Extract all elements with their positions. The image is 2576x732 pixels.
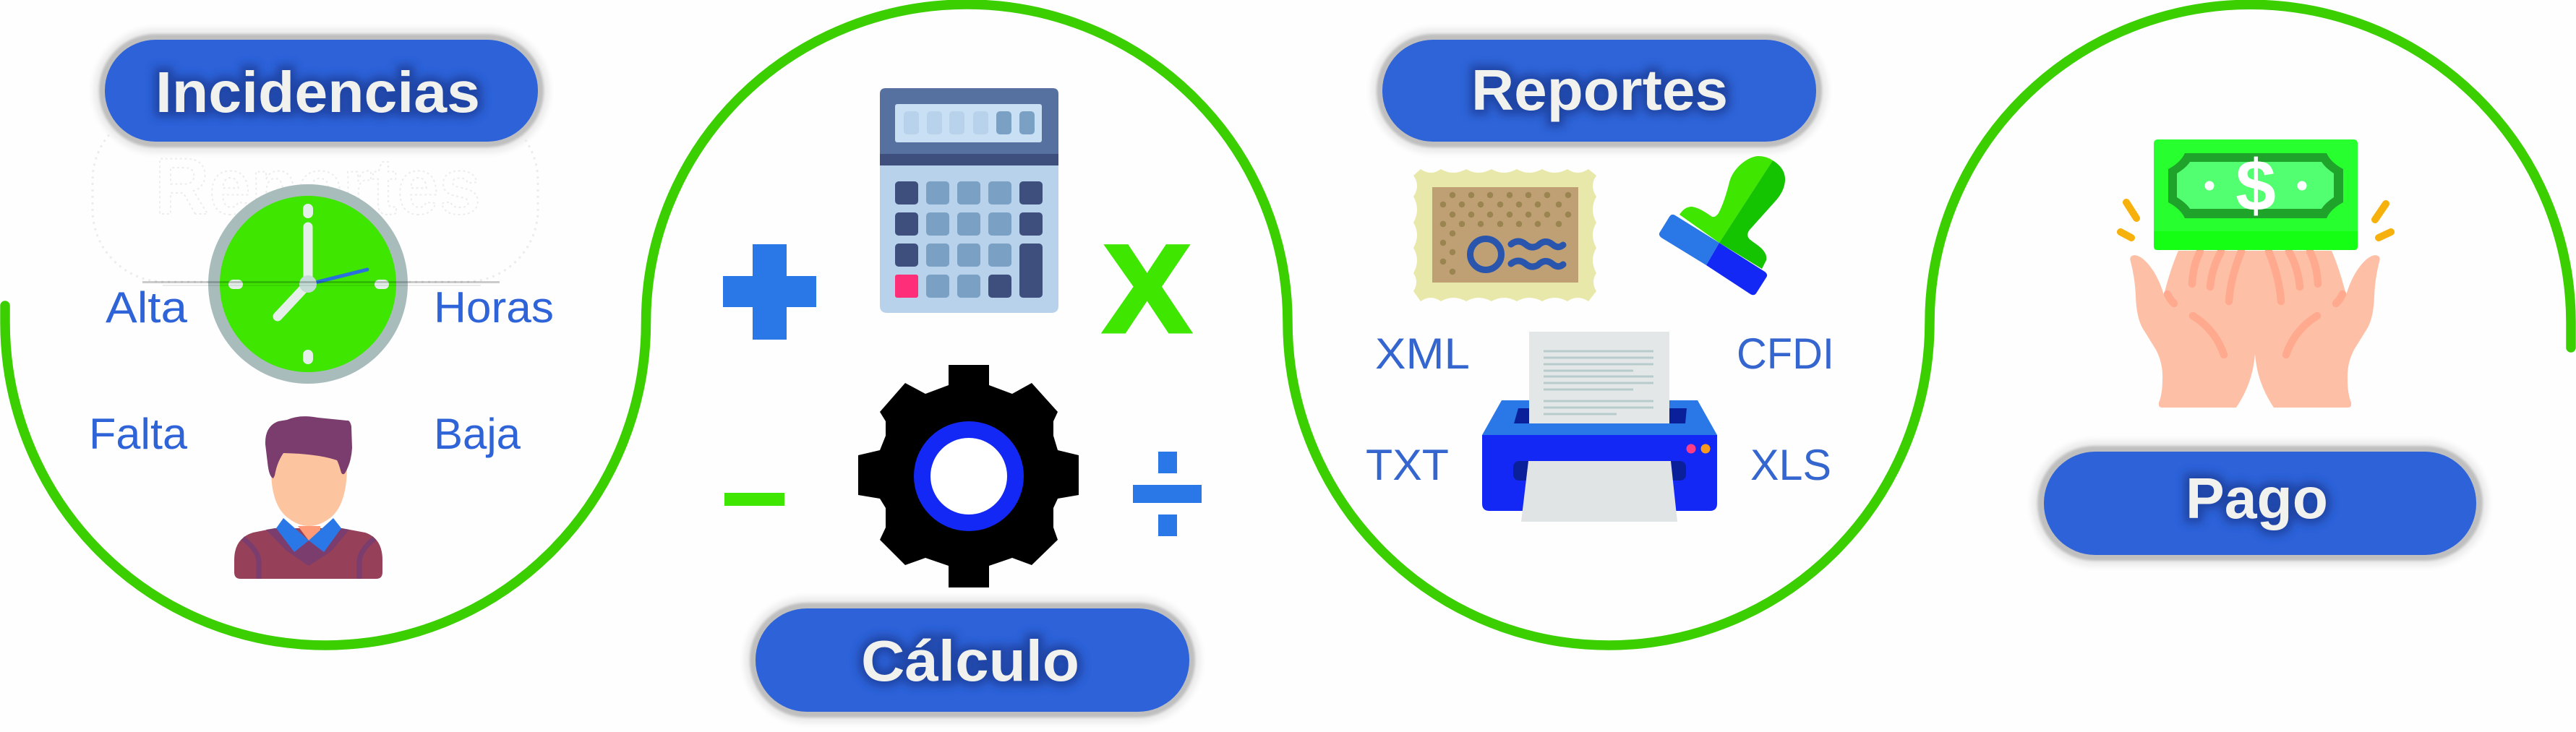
icon: rubber stamp (1659, 156, 1785, 295)
heading pill: Incidencias: Incidencias (155, 60, 480, 124)
icon: stamp certificate (1413, 169, 1596, 301)
heading pill: Pago: Pago (2186, 466, 2328, 530)
label: Alta: Alta (106, 283, 188, 332)
icon: minus sign (724, 493, 784, 506)
ghost artifact behind the heading (93, 108, 538, 282)
icon: employee (234, 416, 382, 579)
label: Falta: Falta (89, 410, 188, 458)
icon: clock (208, 184, 408, 384)
heading pill: Reportes: Reportes (1471, 58, 1728, 122)
heading pill: Cálculo: Cálculo (861, 629, 1079, 693)
label: CFDI: CFDI (1737, 330, 1834, 378)
icon: plus sign (723, 244, 816, 340)
icon: sparkles (2121, 202, 2391, 238)
heading pill: Reportes: Reportes (1471, 58, 1728, 122)
multiplication sign: X (1103, 220, 1191, 358)
icon: printer (1482, 332, 1717, 522)
heading pill: Cálculo: Cálculo (861, 629, 1079, 693)
label: Horas: Horas (434, 283, 554, 332)
label: TXT: TXT (1366, 441, 1449, 489)
ghost artifact behind the heading: Reportes (155, 142, 481, 231)
heading pill: Pago (2032, 440, 2489, 567)
icon: banknote (2154, 139, 2358, 250)
heading pill: Cálculo (744, 597, 1201, 723)
panel: pago (2032, 139, 2489, 567)
icon: division sign (1133, 452, 1202, 536)
ghost baseline across the clock (142, 281, 500, 286)
panel: reportes (1366, 28, 1834, 522)
icon: hands (2130, 251, 2380, 408)
icon: calculator (880, 88, 1058, 313)
panel: calculo (723, 88, 1202, 723)
label: XLS: XLS (1750, 441, 1831, 489)
panel: incidencias (89, 28, 554, 579)
heading pill: Incidencias (93, 28, 549, 153)
icon: banknote: $ (2235, 145, 2276, 226)
icon: gear (858, 365, 1079, 587)
label: XML: XML (1375, 330, 1470, 378)
heading pill: Reportes (1371, 28, 1828, 153)
heading pill: Pago: Pago (2186, 466, 2328, 530)
heading pill: Incidencias: Incidencias (155, 60, 480, 124)
label: Baja: Baja (434, 410, 521, 458)
